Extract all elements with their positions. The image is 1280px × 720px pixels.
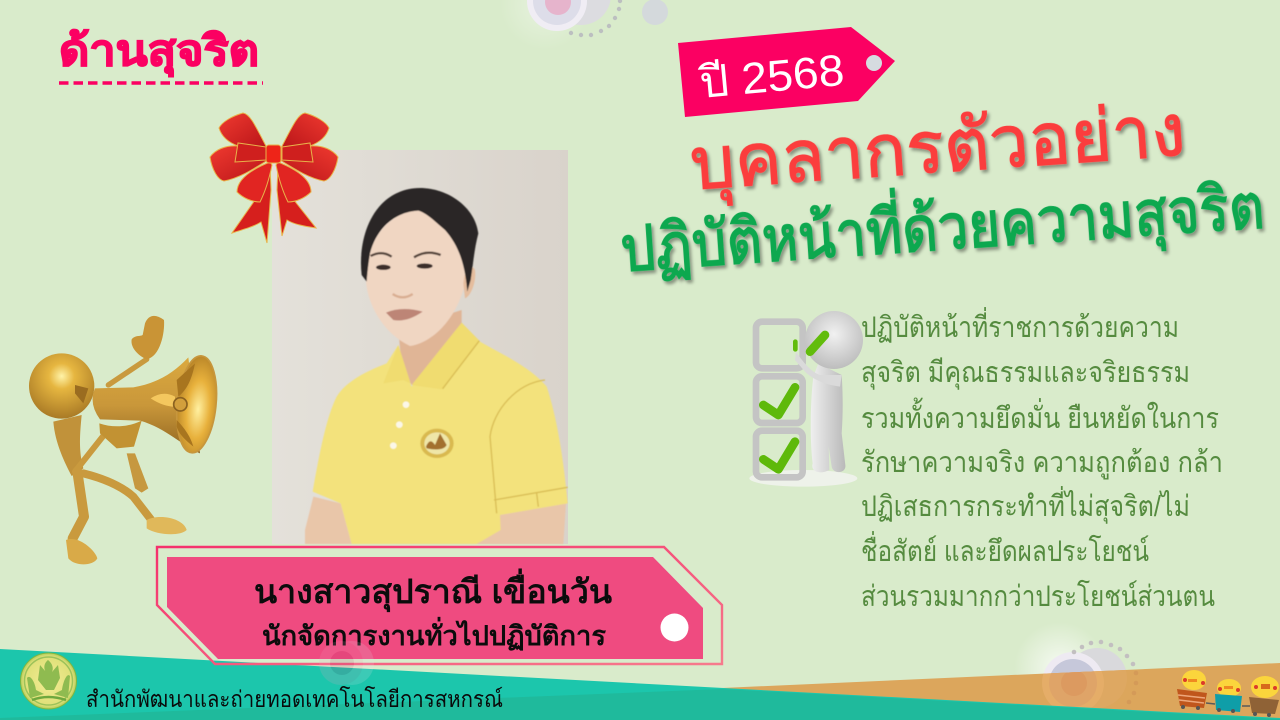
body text: สุจริต มีคุณธรรมและจริยธรรม [861, 357, 1190, 390]
decoration: top circles [500, 0, 668, 50]
footer teal band [0, 649, 1280, 720]
icon: figure with checklist [749, 311, 863, 487]
body text: ส่วนรวมมากกว่าประโยชน์ส่วนตน [861, 579, 1215, 613]
duck one [1177, 670, 1207, 710]
year text: ปี 2568 [696, 46, 846, 108]
icon: gold figure with megaphone [29, 316, 221, 564]
body text: ปฏิบัติหน้าที่ราชการด้วยความ [861, 307, 1179, 344]
sale tag: year [678, 27, 895, 117]
name banner [157, 547, 722, 664]
footer orange band [723, 663, 1280, 718]
decoration: lower right circles [1014, 622, 1135, 714]
logo seal [20, 653, 76, 709]
body text: ชื่อสัตย์ และยึดผลประโยชน์ [861, 531, 1149, 568]
bow left half [210, 113, 272, 243]
photo: portrait [272, 150, 568, 544]
icon: ducks in carts [1177, 670, 1279, 717]
position: นักจัดการงานทั่วไปปฏิบัติการ [262, 616, 606, 651]
decoration: faint circles under banner [319, 641, 374, 685]
body text [861, 307, 1223, 613]
name: นางสาวสุปราณี เขื่อนวัน [254, 568, 612, 613]
body text: ปฏิเสธการกระทำที่ไม่สุจริต/ไม่ [861, 486, 1190, 524]
body text: รวมทั้งความยึดมั่น ยืนหยัดในการ [861, 397, 1219, 435]
bow right half [276, 113, 338, 236]
footer text: สำนักพัฒนาและถ่ายทอดเทคโนโลยีการสหกรณ์ [86, 686, 503, 712]
title line 1: บุคลากรตัวอย่าง [688, 91, 1188, 208]
category heading: ด้านสุจริต [59, 27, 259, 77]
body text: รักษาความจริง ความถูกต้อง กล้า [861, 447, 1223, 480]
icon: red bow [210, 113, 338, 243]
duck two [1215, 679, 1242, 713]
duck three [1249, 676, 1279, 717]
